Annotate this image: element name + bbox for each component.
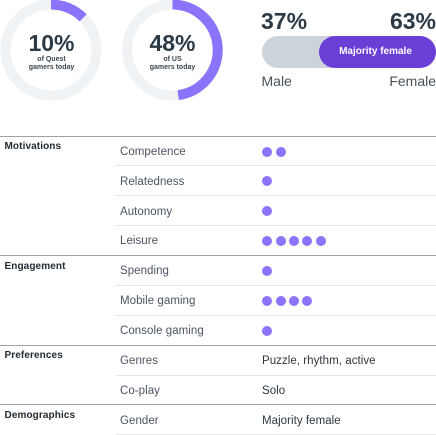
donut chart: 48% of US gamers (122, 0, 223, 100)
heading: Motivations: Motivations (4, 140, 61, 152)
rating: 1 dot (262, 326, 272, 336)
stat: 10%: 10% (28, 30, 75, 56)
caption: of Quest gamers today (29, 56, 74, 71)
rating: 5 dots (262, 236, 326, 246)
row label: Relatedness: Relatedness (120, 176, 184, 188)
row label: Spending: Spending (120, 265, 169, 277)
row label: Mobile gaming: Mobile gaming (120, 295, 195, 307)
heading: Preferences: Preferences (4, 350, 63, 360)
rating: 1 dot (262, 206, 272, 216)
row label: Competence: Competence (120, 146, 186, 158)
caption: of Quest gamers today: of Quest (37, 56, 66, 62)
heading: Engagement: Engagement (4, 260, 66, 272)
caption: of US gamers today (150, 56, 196, 71)
value: Puzzle, rhythm, active: Puzzle, rhythm, active (262, 354, 376, 366)
bar segment: majority female (319, 36, 436, 68)
caption: of Quest gamers today: gamers today (29, 64, 74, 71)
caption: of US gamers today: gamers today (150, 64, 195, 71)
row label: Gender: Gender (120, 414, 159, 426)
value: Majority female: Majority female (262, 414, 341, 426)
row label: Autonomy: Autonomy (120, 206, 172, 218)
rating: 4 dots (262, 296, 312, 306)
gender split bar (262, 36, 436, 68)
stat: 48%: 48% (149, 30, 196, 56)
donut chart: 10% of Quest gamers (0, 0, 102, 100)
stat: 37% male: 37% (261, 8, 307, 34)
stat: 63% female: 63% (390, 8, 436, 34)
caption: of US gamers today: of US (163, 56, 182, 62)
rating: 1 dot (262, 176, 272, 186)
rating: 1 dot (262, 266, 272, 276)
label: Female: Female (389, 72, 436, 88)
rating: 2 dots (262, 147, 286, 157)
row label: Leisure: Leisure (120, 235, 158, 247)
heading: Demographics: Demographics (4, 410, 75, 420)
row label: Console gaming: Console gaming (120, 325, 204, 337)
row label: Co-play: Co-play (120, 384, 160, 396)
label: Male: Male (262, 72, 292, 88)
row label: Genres: Genres (120, 354, 158, 366)
bar segment: majority female: Majority female (339, 46, 412, 57)
value: Solo: Solo (262, 384, 285, 396)
